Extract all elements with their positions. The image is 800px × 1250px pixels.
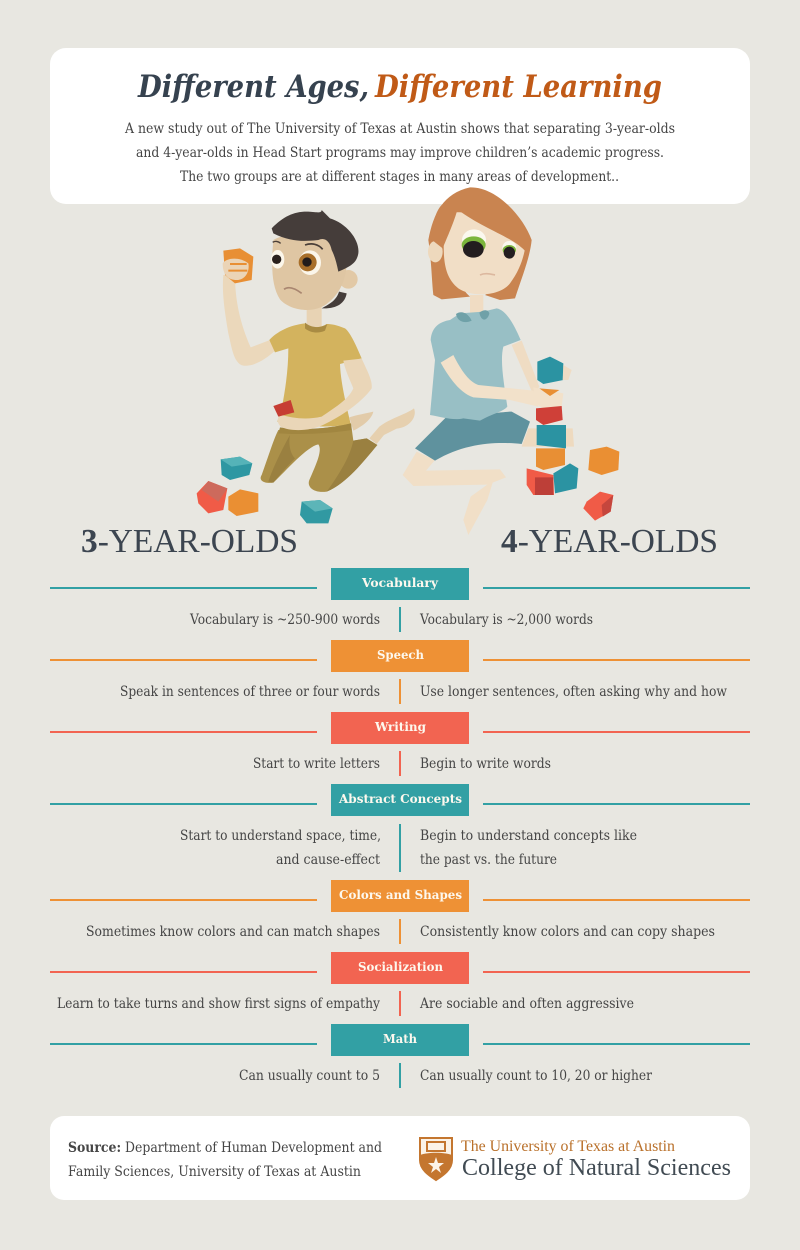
section: vocabulary	[50, 568, 750, 632]
title	[137, 69, 662, 105]
legs	[403, 452, 506, 535]
section: vocabulary: Vocabulary	[361, 575, 439, 590]
section: colors and shapes: Sometimes know colors and can match shapes	[86, 924, 380, 940]
section: speech: Speak in sentences of three or four words	[120, 684, 380, 700]
lower arm	[278, 359, 372, 430]
collar	[305, 323, 327, 333]
section: vocabulary: Vocabulary is ~250-900 words	[189, 612, 380, 628]
section: vocabulary: Vocabulary is ~2,000 words	[419, 612, 593, 628]
neck	[307, 303, 322, 328]
section: math: Can usually count to 10, 20 or higher	[420, 1068, 652, 1084]
section: math	[50, 1024, 750, 1088]
collar	[456, 310, 489, 322]
pants	[261, 423, 377, 492]
sideburn	[322, 292, 347, 308]
section: colors and shapes: Colors and Shapes	[339, 887, 462, 902]
section: writing: Start to write letters	[253, 756, 380, 772]
section: writing: Writing	[374, 719, 426, 734]
intro text: and 4-year-olds in Head Start programs may improve children’s academic progress.	[136, 145, 664, 161]
blocks on floor	[197, 457, 333, 523]
section: speech: Speech	[377, 647, 424, 662]
section: abstract concepts: Abstract Concepts	[338, 791, 462, 806]
heading: 4-year-olds: 4-YEAR-OLDS	[501, 523, 718, 560]
logo text: The University of Texas at Austin	[461, 1138, 675, 1155]
illustration: girl with block tower	[403, 187, 619, 535]
section: socialization	[50, 952, 750, 1016]
hair back	[428, 187, 532, 300]
block tower	[527, 357, 578, 495]
ear	[339, 270, 358, 289]
right arm back	[512, 341, 539, 395]
section: abstract concepts	[50, 784, 750, 872]
heading: 3-year-olds: 3-YEAR-OLDS	[81, 523, 298, 560]
neck	[470, 295, 483, 318]
section: colors and shapes	[50, 880, 750, 944]
ear	[428, 241, 443, 262]
loose blocks	[583, 447, 619, 521]
section: abstract concepts: and cause-effect	[276, 852, 380, 868]
title: Different Ages,	[137, 69, 369, 105]
section: math: Can usually count to 5	[239, 1068, 380, 1084]
shorts	[415, 412, 530, 461]
waistband	[278, 423, 352, 434]
panel: intro	[50, 48, 750, 204]
icon: university shield	[420, 1138, 452, 1180]
red block in hand	[273, 400, 294, 417]
section: speech: Use longer sentences, often asking why and how	[420, 684, 727, 700]
hair	[272, 210, 358, 272]
panel: source and logo	[50, 1116, 750, 1200]
mouth	[480, 274, 495, 275]
section: socialization: Learn to take turns and show first signs of empathy	[57, 996, 380, 1012]
eyes	[462, 229, 516, 259]
raised arm	[223, 275, 275, 366]
section: socialization: Are sociable and often aggressive	[419, 996, 634, 1012]
shirt	[269, 323, 362, 426]
far foot	[349, 412, 373, 431]
section: abstract concepts: Start to understand space, time,	[180, 828, 381, 844]
section: writing	[50, 712, 750, 776]
fringe	[430, 195, 529, 253]
section: abstract concepts: the past vs. the future	[420, 852, 557, 868]
pants shading	[268, 435, 377, 492]
section: socialization: Socialization	[358, 959, 443, 974]
section: writing: Begin to write words	[420, 756, 551, 772]
section: abstract concepts: Begin to understand concepts like	[420, 828, 637, 844]
section: colors and shapes: Consistently know colors and can copy shapes	[420, 924, 715, 940]
logo text: College of Natural Sciences	[462, 1155, 731, 1181]
title: Different Learning	[374, 69, 662, 105]
face	[444, 212, 526, 294]
intro text: The two groups are at different stages in many areas of development..	[180, 169, 619, 185]
near foot	[369, 408, 415, 444]
source text: Source: Department of Human Development and	[68, 1140, 382, 1156]
orange block and hand	[223, 248, 253, 283]
front arm	[441, 355, 538, 407]
illustration: boy with blocks	[197, 210, 415, 523]
source text: Family Sciences, University of Texas at Austin	[68, 1164, 361, 1180]
intro text: A new study out of The University of Texas at Austin shows that separating 3-year-olds	[124, 121, 675, 137]
source text	[68, 1140, 382, 1180]
eyes	[271, 241, 323, 275]
logo text	[461, 1138, 731, 1181]
head	[272, 235, 347, 310]
shirt	[430, 308, 521, 421]
mouth	[284, 288, 302, 293]
section: math: Math	[383, 1031, 417, 1046]
intro text	[124, 121, 675, 185]
right knee	[522, 428, 574, 447]
section: speech	[50, 640, 750, 704]
